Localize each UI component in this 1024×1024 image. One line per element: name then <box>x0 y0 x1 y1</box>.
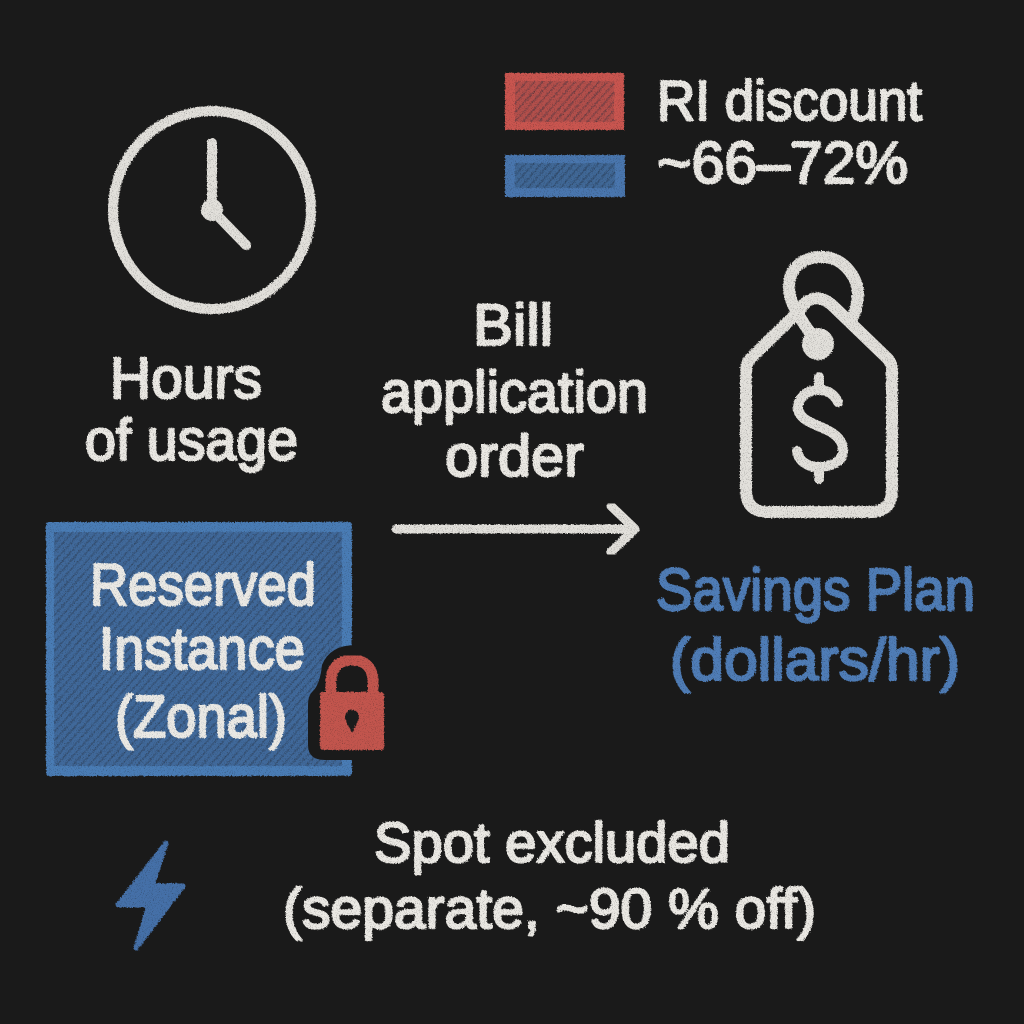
legend text: ~66–72% <box>657 130 908 196</box>
legend swatch: red <box>505 73 624 130</box>
label: hours of usage: Hours <box>110 346 262 411</box>
label: savings plan <box>656 557 975 693</box>
label: bill application order: order <box>445 424 584 489</box>
label: hours of usage <box>85 346 298 473</box>
icon: lock <box>320 660 384 750</box>
panel: reserved instance <box>46 522 400 776</box>
label: bill application order <box>381 293 648 489</box>
label: savings plan: (dollars/hr) <box>670 627 960 693</box>
icon: lightning bolt <box>118 843 183 948</box>
note: spot excluded: Spot excluded <box>374 811 730 875</box>
legend text <box>657 69 922 196</box>
panel text: (Zonal) <box>115 684 287 750</box>
panel fill <box>46 522 352 776</box>
label: savings plan: Savings Plan <box>656 557 975 623</box>
label: bill application order: application <box>381 360 648 425</box>
label: bill application order: Bill <box>473 293 553 358</box>
icon: clock <box>113 111 311 309</box>
note: spot excluded <box>283 811 816 941</box>
lock cutout <box>308 645 400 760</box>
panel text: Reserved <box>90 552 316 618</box>
panel text <box>90 552 316 750</box>
label: hours of usage: of usage <box>85 408 298 473</box>
arrow <box>396 506 635 552</box>
note: spot excluded: (separate, ~90 % off) <box>283 877 816 941</box>
panel text: Instance <box>99 616 305 682</box>
icon: price tag <box>746 257 892 512</box>
legend swatch: blue <box>505 155 625 197</box>
legend text: RI discount <box>657 69 922 133</box>
legend <box>505 69 922 197</box>
